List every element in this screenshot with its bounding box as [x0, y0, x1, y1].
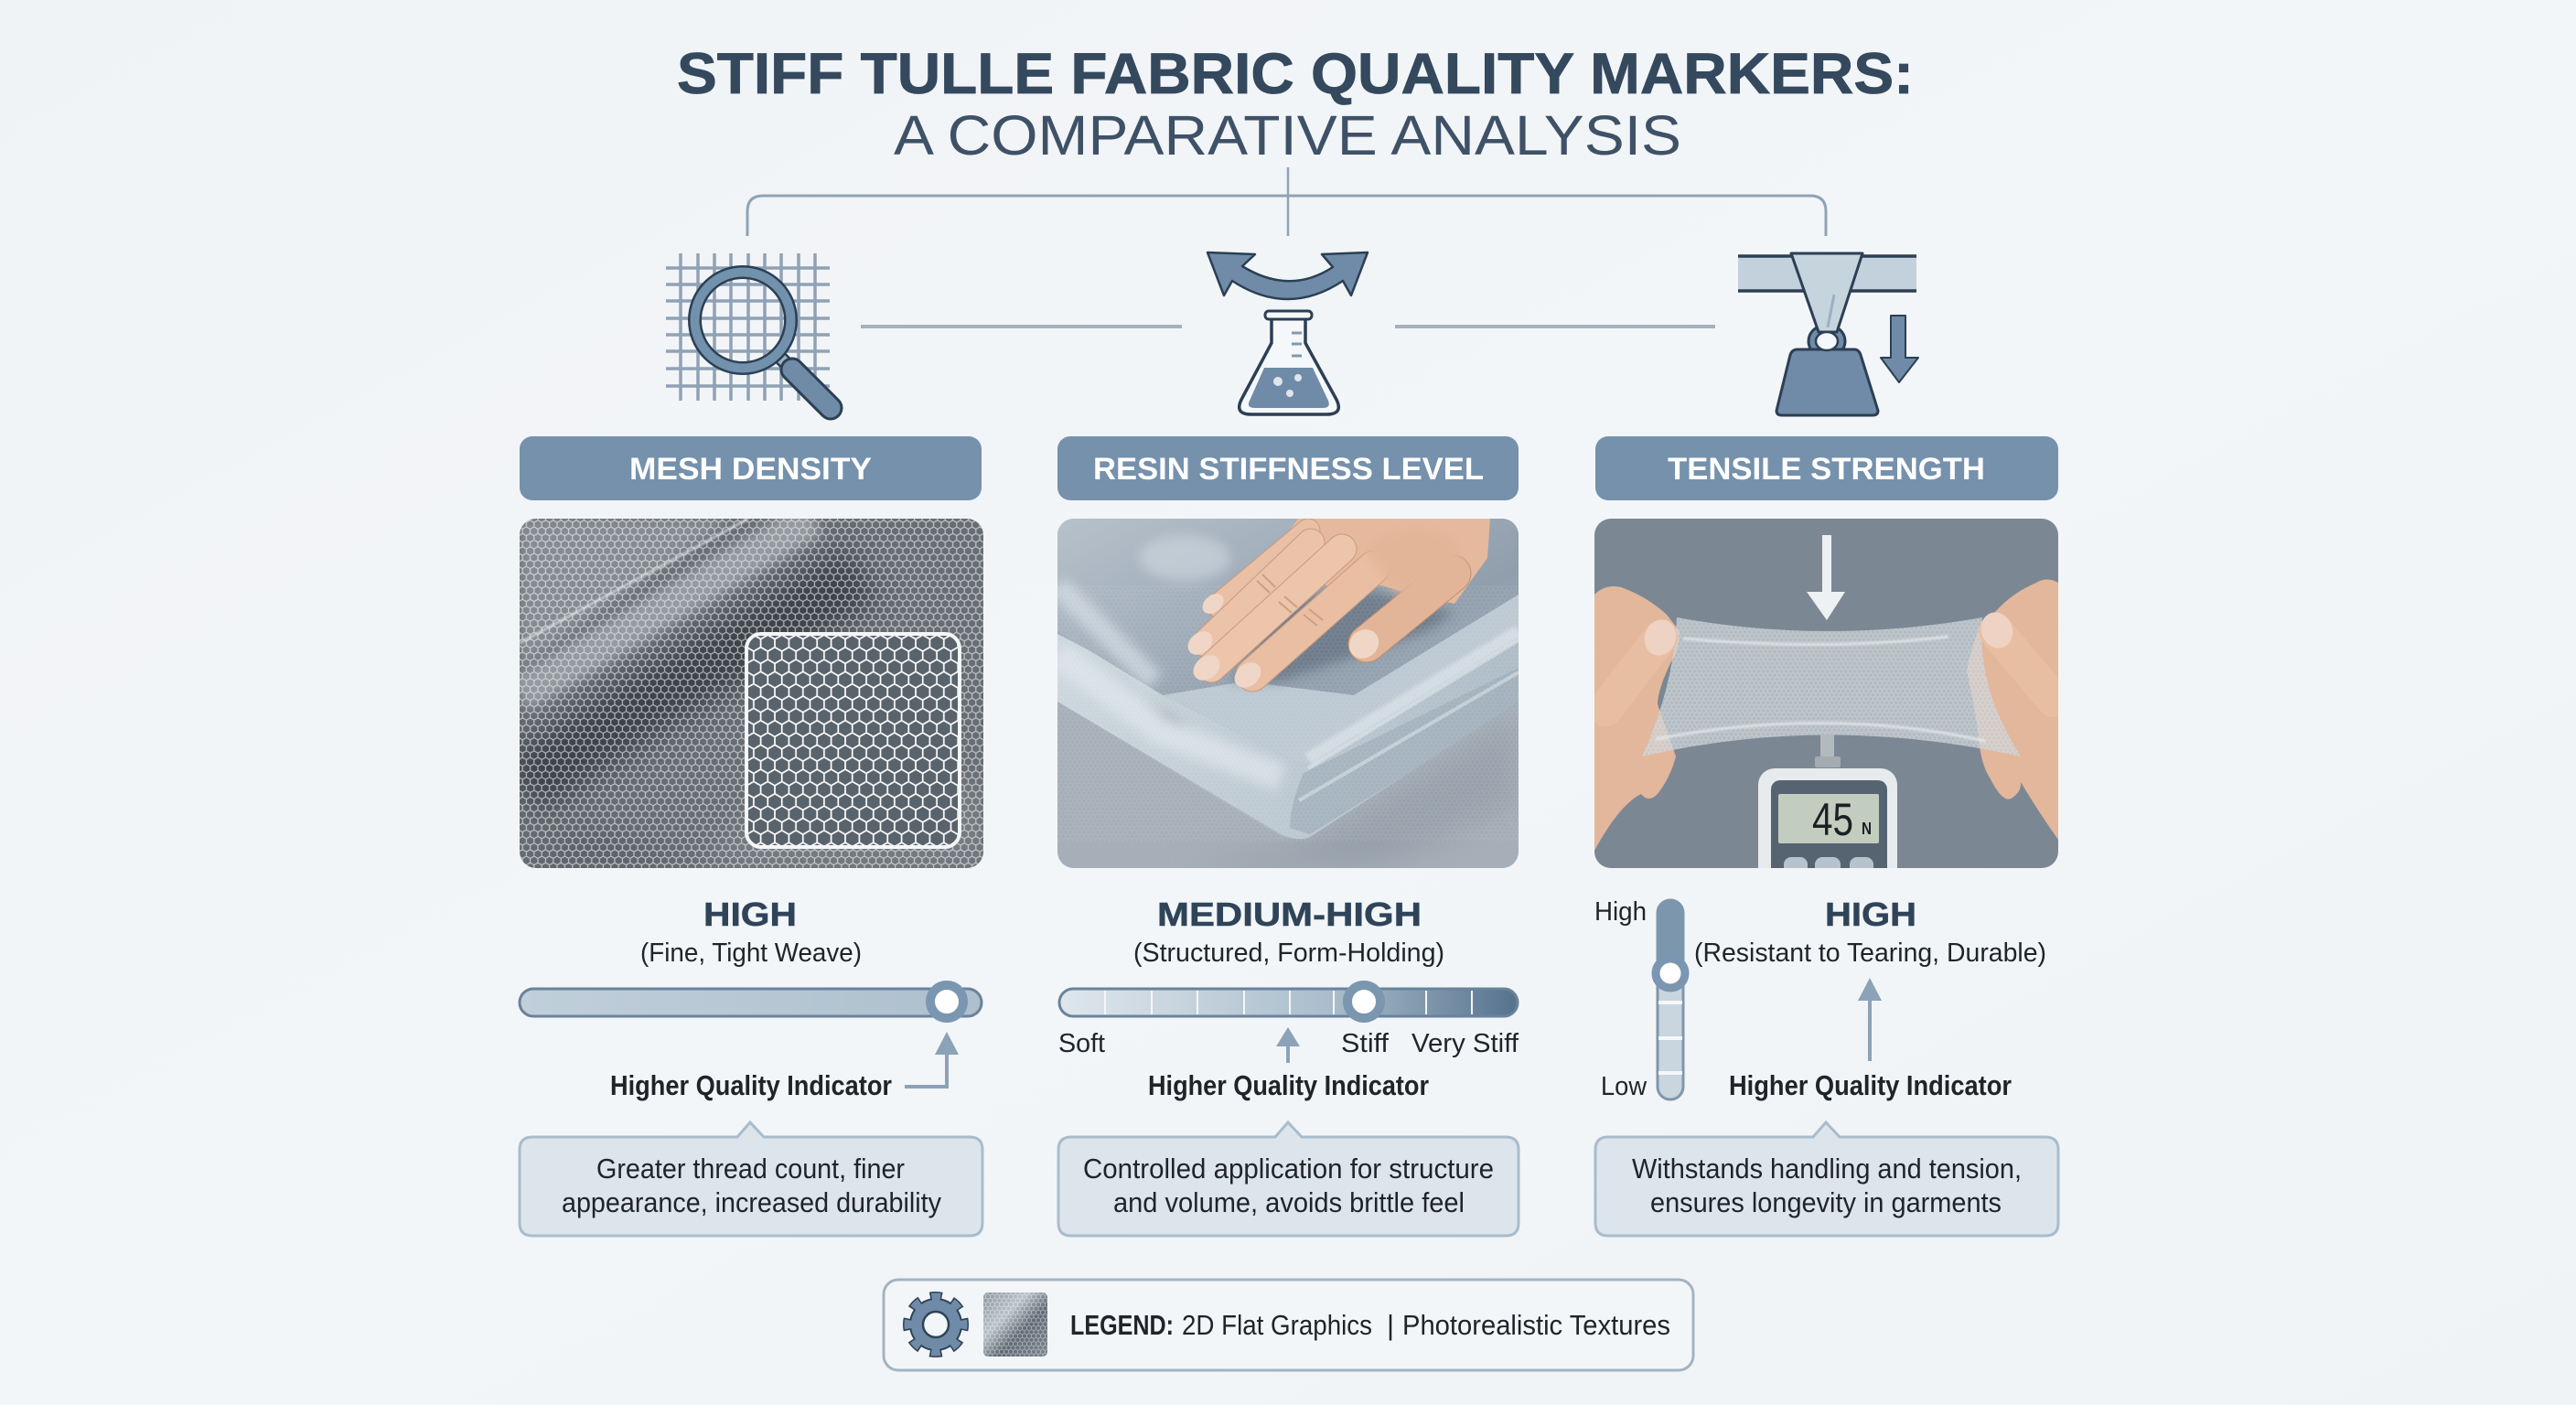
- icon: flexing arrow and flask: [1208, 252, 1368, 414]
- slider scale labels: Soft: [1058, 1029, 1105, 1058]
- slider: mesh density: [520, 985, 982, 1018]
- left hand: [1594, 586, 1680, 851]
- arrow: tensile quality indicator: [1858, 978, 1882, 1061]
- callout: tensile strength: Withstands handling and tension,: [1632, 1153, 2022, 1185]
- rating: mesh density: (Fine, Tight Weave): [640, 938, 862, 968]
- header: resin stiffness level: RESIN STIFFNESS LEVEL: [1093, 452, 1484, 487]
- slider: tensile strength: High: [1594, 897, 1647, 927]
- hand: [1183, 519, 1490, 692]
- callout: resin stiffness: and volume, avoids brittle feel: [1113, 1186, 1465, 1218]
- force gauge: 45: [1812, 794, 1853, 845]
- photo: tulle mesh with inset: [520, 519, 983, 868]
- label: higher quality indicator, mesh: Higher Quality Indicator: [610, 1069, 892, 1101]
- slider scale labels: Very Stiff: [1411, 1029, 1519, 1058]
- arrow: resin quality indicator: [1276, 1027, 1300, 1063]
- inset: enlarged hex mesh: [746, 634, 960, 847]
- legend text: [1070, 1309, 1670, 1341]
- photo: hand on stiff fabric: [1057, 519, 1519, 868]
- rating: tensile strength: [1694, 896, 2046, 968]
- title: [677, 42, 1914, 166]
- icon: gear: [903, 1292, 969, 1357]
- slider scale labels: Stiff: [1341, 1029, 1390, 1058]
- callout: mesh density: [520, 1122, 982, 1236]
- legend text: |: [1387, 1309, 1394, 1341]
- slider scale labels: [1058, 1029, 1519, 1058]
- header: resin stiffness level: [1057, 436, 1519, 500]
- rating: resin stiffness: (Structured, Form-Holding): [1133, 938, 1444, 968]
- callout: mesh density: appearance, increased durability: [562, 1186, 941, 1218]
- callout: resin stiffness: [1058, 1122, 1519, 1236]
- callout: tensile strength: [1595, 1122, 2058, 1236]
- legend text: 2D Flat Graphics: [1182, 1309, 1372, 1341]
- rating: mesh density: [640, 896, 862, 968]
- header: tensile strength: TENSILE STRENGTH: [1668, 452, 1985, 487]
- icon: tensile clamp and weight: [1738, 253, 1918, 415]
- legend text: Photorealistic Textures: [1402, 1309, 1670, 1341]
- rating: tensile strength: HIGH: [1825, 896, 1916, 933]
- callout: mesh density: Greater thread count, finer: [596, 1153, 905, 1185]
- rating: resin stiffness: MEDIUM-HIGH: [1157, 896, 1422, 933]
- callout: tensile strength: ensures longevity in garments: [1650, 1186, 2002, 1218]
- down arrow: [1807, 535, 1845, 620]
- arrow: mesh quality indicator: [905, 1032, 959, 1087]
- rating: resin stiffness: [1133, 896, 1444, 968]
- photo: fabric tensile test: [1594, 519, 2058, 887]
- header: tensile strength: [1595, 436, 2058, 500]
- divider left: [861, 325, 1182, 328]
- label: higher quality indicator, resin: Higher Quality Indicator: [1148, 1069, 1429, 1101]
- title: STIFF TULLE FABRIC QUALITY MARKERS:: [677, 42, 1914, 106]
- rating: mesh density: HIGH: [703, 896, 797, 933]
- slider: tensile strength: [1594, 897, 1685, 1101]
- title: A COMPARATIVE ANALYSIS: [894, 104, 1681, 166]
- icon: mesh with magnifier: [666, 253, 831, 408]
- connector bracket: [747, 167, 1826, 236]
- label: higher quality indicator, tensile: Higher Quality Indicator: [1729, 1069, 2012, 1101]
- header: mesh density: MESH DENSITY: [629, 452, 872, 487]
- rating: tensile strength: (Resistant to Tearing, Durable): [1694, 938, 2046, 968]
- fabric strip: [1642, 617, 2021, 756]
- right hand: [1967, 580, 2058, 840]
- force gauge: N: [1862, 820, 1872, 838]
- force gauge: [1758, 735, 1897, 868]
- header: mesh density: [520, 436, 982, 500]
- legend: [884, 1280, 1693, 1370]
- slider: tensile strength: Low: [1601, 1072, 1648, 1101]
- legend text: LEGEND:: [1070, 1309, 1174, 1341]
- thumbs: [1645, 612, 2012, 656]
- divider right: [1395, 325, 1715, 328]
- swatch: photorealistic texture: [983, 1292, 1047, 1357]
- callout: resin stiffness: Controlled application for structure: [1083, 1153, 1494, 1185]
- slider: resin stiffness: [1059, 985, 1518, 1018]
